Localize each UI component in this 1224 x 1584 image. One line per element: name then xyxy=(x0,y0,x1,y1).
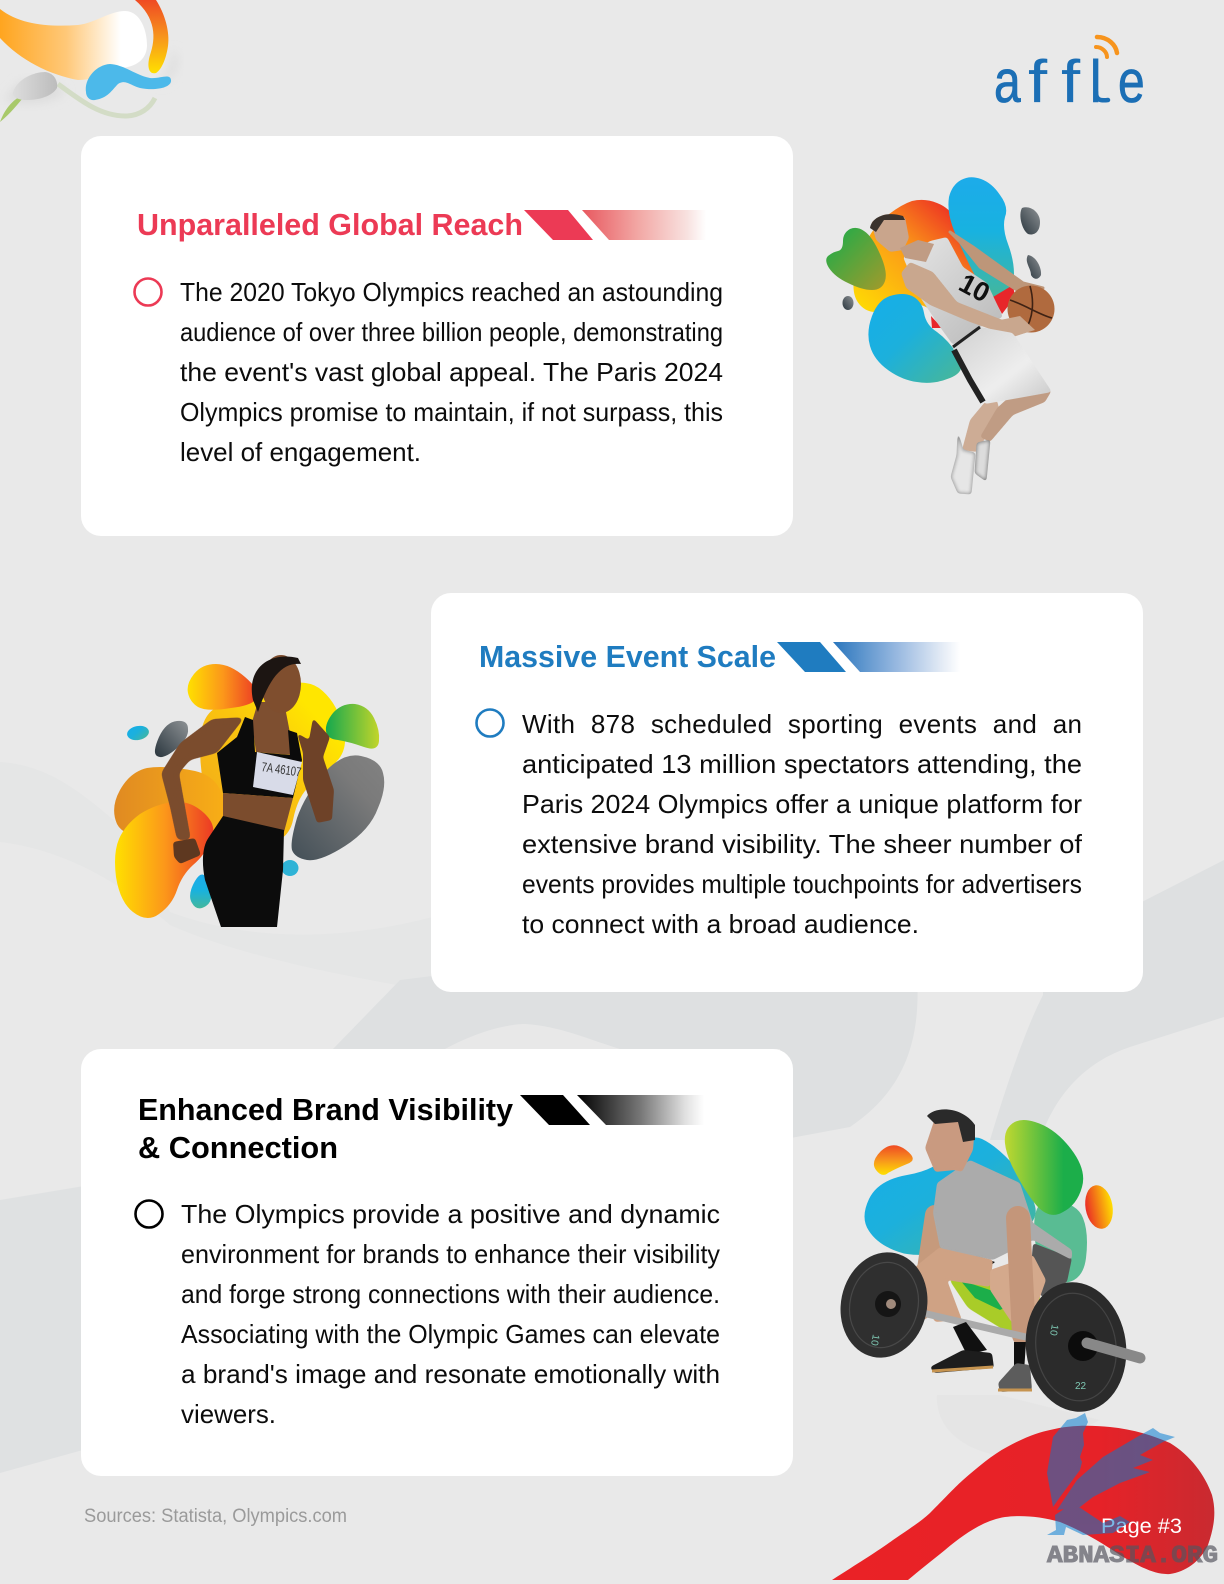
logo: affle xyxy=(994,37,1145,115)
body text: Associating with the Olympic Games can elevate xyxy=(181,1319,720,1349)
illustration: runner xyxy=(114,655,384,927)
body text: a brand's image and resonate emotionally with xyxy=(181,1359,720,1389)
lifter figure xyxy=(831,1109,1140,1418)
decoration: top-left swooshes xyxy=(0,0,178,122)
body text xyxy=(522,709,1083,939)
heading: Massive Event Scale xyxy=(479,639,776,674)
body text: level of engagement. xyxy=(180,437,421,467)
body text xyxy=(181,1199,720,1429)
heading accent xyxy=(777,642,960,672)
logo: affle: f xyxy=(1061,47,1081,115)
body text: The Olympics provide a positive and dynamic xyxy=(181,1199,720,1229)
body text: audience of over three billion people, demonstrating xyxy=(180,317,723,347)
bullet circle xyxy=(476,710,504,736)
heading: Enhanced Brand Visibility xyxy=(138,1092,514,1127)
body text: Olympics promise to maintain, if not surpass, this xyxy=(180,397,723,427)
bullet circle xyxy=(136,1200,162,1228)
body text: The 2020 Tokyo Olympics reached an astounding xyxy=(180,277,723,307)
logo: affle: l xyxy=(1089,48,1102,115)
background waves xyxy=(0,762,1224,1473)
player figure xyxy=(870,214,1054,494)
body text: the event's vast global appeal. The Paris 2024 xyxy=(180,357,723,387)
panel: Massive Event Scale xyxy=(431,593,1143,992)
player figure: 10 xyxy=(954,268,995,308)
colour blobs xyxy=(864,1120,1116,1335)
body text: and forge strong connections with their audience. xyxy=(181,1279,720,1309)
footer: sources: Sources: Statista, Olympics.com xyxy=(84,1506,347,1527)
panel: Enhanced Brand Visibility & Connection xyxy=(81,1049,793,1476)
body text xyxy=(180,277,723,467)
lifter figure: 22 xyxy=(1075,1381,1087,1392)
decoration: red swoosh xyxy=(832,1426,1214,1580)
heading accent xyxy=(520,1095,704,1125)
colour blobs xyxy=(114,664,384,918)
body text: anticipated 13 million spectators attending, the xyxy=(522,749,1082,779)
watermark: bird xyxy=(1047,1413,1175,1535)
illustration: weightlifter xyxy=(831,1109,1140,1418)
bullet circle xyxy=(134,278,162,306)
runner figure xyxy=(161,655,334,927)
body text: Paris 2024 Olympics offer a unique platform for xyxy=(522,789,1082,819)
heading xyxy=(138,1092,514,1165)
body text: extensive brand visibility. The sheer number of xyxy=(522,829,1083,859)
illustration: basketball player xyxy=(826,177,1054,494)
body text: to connect with a broad audience. xyxy=(522,909,919,939)
lifter figure: 10 xyxy=(1047,1323,1060,1337)
panel: Unparalleled Global Reach xyxy=(81,136,793,536)
lifter figure: 10 xyxy=(868,1333,881,1347)
page number: Page #3 xyxy=(1101,1515,1182,1538)
heading: Unparalleled Global Reach xyxy=(137,207,523,242)
body text: With 878 scheduled sporting events and an xyxy=(522,709,1082,739)
logo: affle: e xyxy=(1118,48,1145,115)
body text: viewers. xyxy=(181,1399,276,1429)
body text: events provides multiple touchpoints for advertisers xyxy=(522,869,1082,899)
icon: signal arcs xyxy=(1096,37,1117,57)
runner figure: 7A 46107 xyxy=(261,759,302,780)
body text: environment for brands to enhance their visibility xyxy=(181,1239,720,1269)
watermark: site name: ABNASIA.ORG xyxy=(1047,1543,1218,1570)
heading: & Connection xyxy=(138,1130,338,1165)
heading accent xyxy=(524,210,706,240)
logo: affle: a xyxy=(994,48,1021,115)
colour blobs xyxy=(826,177,1041,383)
logo: affle: f xyxy=(1028,47,1048,115)
